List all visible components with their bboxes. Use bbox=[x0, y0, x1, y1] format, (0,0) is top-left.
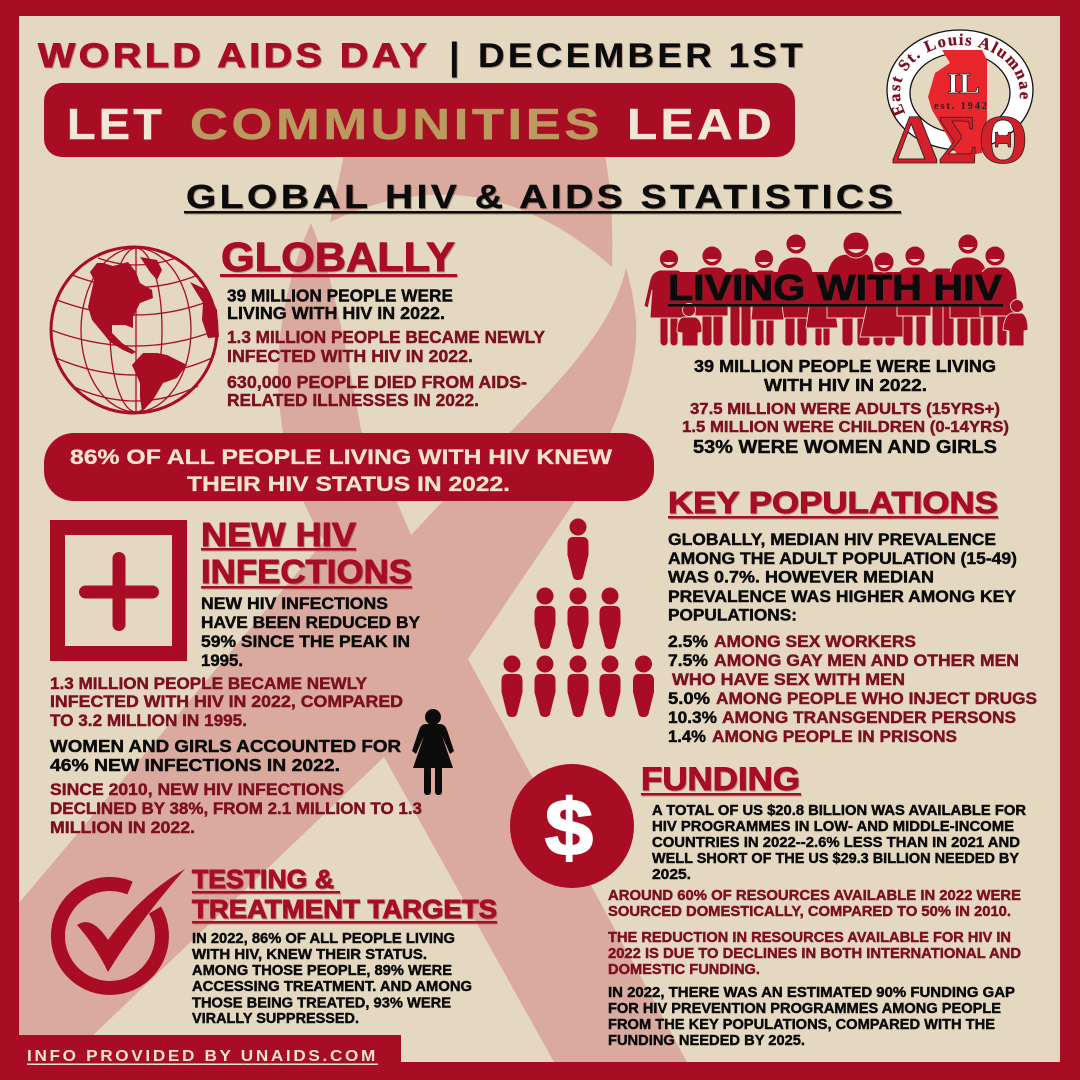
list: key population rates: AMONG TRANSGENDER PERSONS bbox=[722, 709, 1016, 727]
list: key population rates: AMONG PEOPLE IN PRISONS bbox=[712, 728, 957, 746]
icon: check mark in circle bbox=[58, 869, 185, 988]
heading: new hiv infections: NEW HIV bbox=[201, 516, 356, 553]
text: global statistics bbox=[227, 286, 545, 410]
text: testing statistics: ACCESSING TREATMENT. AND AMONG bbox=[192, 979, 472, 995]
list: key population rates: 1.4% bbox=[668, 728, 706, 746]
list: key population rates: 10.3% bbox=[668, 709, 717, 727]
text: new infections statistics: DECLINED BY 38%, FROM 2.1 MILLION TO 1.3 bbox=[50, 800, 422, 818]
logo: east st louis alumnae: Θ bbox=[978, 102, 1028, 179]
back row bodies bbox=[730, 268, 957, 346]
section: funding bbox=[608, 761, 1027, 1049]
logo: east st louis alumnae: Σ bbox=[938, 102, 978, 179]
title: world aids day: WORLD AIDS DAY bbox=[38, 37, 430, 75]
text: funding statistics: FROM THE KEY POPULATIONS, COMPARED WITH THE bbox=[608, 1017, 995, 1033]
heading: global hiv and aids statistics: GLOBAL HIV & AIDS STATISTICS bbox=[186, 178, 897, 215]
heading: testing and treatment targets: TREATMENT TARGETS bbox=[192, 894, 497, 924]
title: world aids day: | bbox=[449, 36, 460, 78]
banner: let communities lead: COMMUNITIES bbox=[190, 100, 603, 149]
list: key population rates: AMONG PEOPLE WHO INJECT DRUGS bbox=[716, 690, 1037, 708]
adults bbox=[644, 254, 1017, 346]
heads bbox=[660, 232, 1005, 272]
icon: dollar coin: $ bbox=[545, 783, 593, 872]
text: testing statistics: THOSE BEING TREATED, 93% WERE bbox=[192, 996, 451, 1012]
title: world aids day bbox=[38, 36, 806, 78]
text: prevalence intro: GLOBALLY, MEDIAN HIV PREVALENCE bbox=[668, 531, 996, 549]
smiles bbox=[663, 247, 1001, 268]
greenland bbox=[140, 257, 162, 280]
banner: let communities lead: LET bbox=[67, 100, 165, 149]
icon: plus in square bbox=[58, 528, 180, 654]
icon: group of people bbox=[644, 232, 1028, 346]
logo: east st louis alumnae: Δ bbox=[892, 102, 938, 179]
text: prevalence intro: WAS 0.7%. HOWEVER MEDIAN bbox=[668, 568, 934, 586]
heading: living with hiv: LIVING WITH HIV bbox=[668, 267, 1002, 308]
list: key population rates: 2.5% bbox=[668, 633, 708, 651]
text: testing statistics: AMONG THOSE PEOPLE, 89% WERE bbox=[192, 963, 452, 979]
logo: east st louis alumnae: East St. Louis Alumnae bbox=[892, 33, 1028, 117]
text: living with hiv statistics: WITH HIV IN 2022. bbox=[764, 375, 927, 395]
text: funding statistics: THE REDUCTION IN RESOURCES AVAILABLE FOR HIV IN bbox=[608, 930, 1011, 946]
icon: dollar coin bbox=[510, 764, 634, 888]
callout: 86 percent knew status: 86% OF ALL PEOPLE LIVING WITH HIV KNEW bbox=[70, 446, 612, 469]
list: key population rates bbox=[668, 633, 1037, 746]
footer: source credit bbox=[19, 1035, 401, 1065]
logo: east st louis alumnae: IL bbox=[947, 69, 980, 100]
text: new infections statistics: 59% SINCE THE PEAK IN bbox=[201, 633, 410, 651]
text: funding statistics: DOMESTIC FUNDING. bbox=[608, 962, 760, 978]
text: testing statistics: WITH HIV, KNEW THEIR STATUS. bbox=[192, 947, 427, 963]
section: globally bbox=[220, 234, 545, 410]
heading: key populations: KEY POPULATIONS bbox=[668, 485, 998, 520]
text: new infections statistics: 46% NEW INFECTIONS IN 2022. bbox=[50, 755, 340, 775]
north america bbox=[88, 262, 153, 354]
children bbox=[677, 300, 1028, 346]
text: new infections statistics: SINCE 2010, NEW HIV INFECTIONS bbox=[50, 781, 344, 799]
text: funding statistics: 2025. bbox=[652, 867, 691, 883]
text: global statistics: RELATED ILLNESSES IN 2022. bbox=[227, 390, 479, 410]
text: funding statistics: COUNTRIES IN 2022--2.6% LESS THAN IN 2021 AND bbox=[652, 835, 1020, 851]
banner: let communities lead bbox=[44, 83, 795, 157]
section: testing and treatment targets bbox=[192, 864, 497, 1027]
south america bbox=[132, 353, 187, 412]
text: global statistics: 1.3 MILLION PEOPLE BECAME NEWLY bbox=[227, 327, 545, 347]
text: living with hiv statistics: 53% WERE WOMEN AND GIRLS bbox=[693, 437, 997, 457]
text: living with hiv statistics: 37.5 MILLION WERE ADULTS (15YRS+) bbox=[690, 401, 1000, 418]
text: new infections statistics: MILLION IN 2022. bbox=[50, 819, 195, 837]
text: global statistics: INFECTED WITH HIV IN 2022. bbox=[227, 346, 473, 366]
text: funding statistics: FUNDING NEEDED BY 2025. bbox=[608, 1033, 805, 1049]
title: world aids day: DECEMBER 1ST bbox=[478, 37, 806, 75]
text: funding statistics: 2022 IS DUE TO DECLINES IN BOTH INTERNATIONAL AND bbox=[608, 946, 1021, 962]
text: funding statistics: A TOTAL OF US $20.8 BILLION WAS AVAILABLE FOR bbox=[652, 803, 1027, 819]
heading: testing and treatment targets: TESTING & bbox=[192, 864, 334, 894]
text: funding statistics: FOR HIV PREVENTION PROGRAMMES AMONG PEOPLE bbox=[608, 1001, 1001, 1017]
text: funding statistics: AROUND 60% OF RESOURCES AVAILABLE IN 2022 WERE bbox=[608, 888, 1021, 904]
text: funding statistics bbox=[608, 803, 1027, 1049]
heading: funding: FUNDING bbox=[641, 761, 800, 797]
list: key population rates: 5.0% bbox=[668, 690, 710, 708]
text: new infections statistics: HAVE BEEN REDUCED BY bbox=[201, 614, 420, 632]
text: new infections statistics: NEW HIV INFECTIONS bbox=[201, 595, 388, 613]
text: prevalence intro: POPULATIONS: bbox=[668, 606, 797, 624]
text: prevalence intro: PREVALENCE WAS HIGHER AMONG KEY bbox=[668, 588, 1016, 606]
text: prevalence intro: AMONG THE ADULT POPULATION (15-49) bbox=[668, 550, 1017, 568]
heading: new hiv infections bbox=[201, 516, 412, 590]
text: new infections statistics: WOMEN AND GIRLS ACCOUNTED FOR bbox=[50, 736, 401, 756]
text: funding statistics: SOURCED DOMESTICALLY, COMPARED TO 50% IN 2010. bbox=[608, 904, 1011, 920]
text: new infections statistics: INFECTED WITH HIV IN 2022, COMPARED bbox=[50, 693, 403, 711]
list: key population rates: AMONG GAY MEN AND OTHER MEN bbox=[714, 652, 1019, 670]
text: prevalence intro bbox=[668, 531, 1017, 624]
text: global statistics: LIVING WITH HIV IN 2022. bbox=[227, 303, 445, 323]
icon: globe bbox=[51, 247, 219, 413]
section: key populations bbox=[668, 485, 1037, 746]
text: living with hiv statistics: 1.5 MILLION WERE CHILDREN (0-14YRS) bbox=[682, 419, 1009, 436]
text: testing statistics: IN 2022, 86% OF ALL PEOPLE LIVING bbox=[192, 931, 455, 947]
icon: woman bbox=[412, 709, 454, 795]
list: key population rates: AMONG SEX WORKERS bbox=[714, 633, 916, 651]
list: key population rates: WHO HAVE SEX WITH MEN bbox=[672, 671, 905, 689]
callout: 86 percent knew status bbox=[44, 433, 654, 501]
text: global statistics: 39 MILLION PEOPLE WERE bbox=[227, 286, 453, 306]
africa and europe bbox=[190, 282, 219, 338]
text: testing statistics: VIRALLY SUPPRESSED. bbox=[192, 1011, 359, 1027]
text: funding statistics: HIV PROGRAMMES IN LOW- AND MIDDLE-INCOME bbox=[652, 819, 1014, 835]
text: living with hiv statistics: 39 MILLION PEOPLE WERE LIVING bbox=[694, 356, 996, 376]
logo: east st louis alumnae bbox=[886, 29, 1034, 179]
heading: new hiv infections: INFECTIONS bbox=[201, 553, 412, 590]
heading: globally: GLOBALLY bbox=[221, 234, 455, 280]
background awareness ribbon bbox=[19, 150, 687, 1062]
icon: pyramid of people bbox=[502, 518, 654, 717]
text: testing statistics bbox=[192, 931, 472, 1027]
text: new infections statistics: 1.3 MILLION PEOPLE BECAME NEWLY bbox=[50, 675, 367, 693]
text: funding statistics: IN 2022, THERE WAS AN ESTIMATED 90% FUNDING GAP bbox=[608, 985, 1015, 1001]
text: new infections statistics: 1995. bbox=[201, 652, 243, 670]
list: key population rates: 7.5% bbox=[668, 652, 708, 670]
text: funding statistics: WELL SHORT OF THE US $29.3 BILLION NEEDED BY bbox=[652, 851, 1019, 867]
text: living with hiv statistics bbox=[682, 356, 1009, 457]
section: new hiv infections bbox=[50, 516, 422, 837]
section: living with hiv bbox=[668, 267, 1009, 457]
footer: source credit: INFO PROVIDED BY UNAIDS.COM bbox=[27, 1048, 378, 1065]
callout: 86 percent knew status: THEIR HIV STATUS IN 2022. bbox=[187, 473, 510, 496]
text: new infections statistics: TO 3.2 MILLION IN 1995. bbox=[50, 712, 247, 730]
text: global statistics: 630,000 PEOPLE DIED FROM AIDS- bbox=[227, 372, 527, 392]
logo: east st louis alumnae: est. 1942 bbox=[934, 101, 987, 112]
text: new infections statistics bbox=[50, 595, 422, 837]
banner: let communities lead: LEAD bbox=[627, 100, 775, 149]
heading: testing and treatment targets bbox=[192, 864, 497, 924]
